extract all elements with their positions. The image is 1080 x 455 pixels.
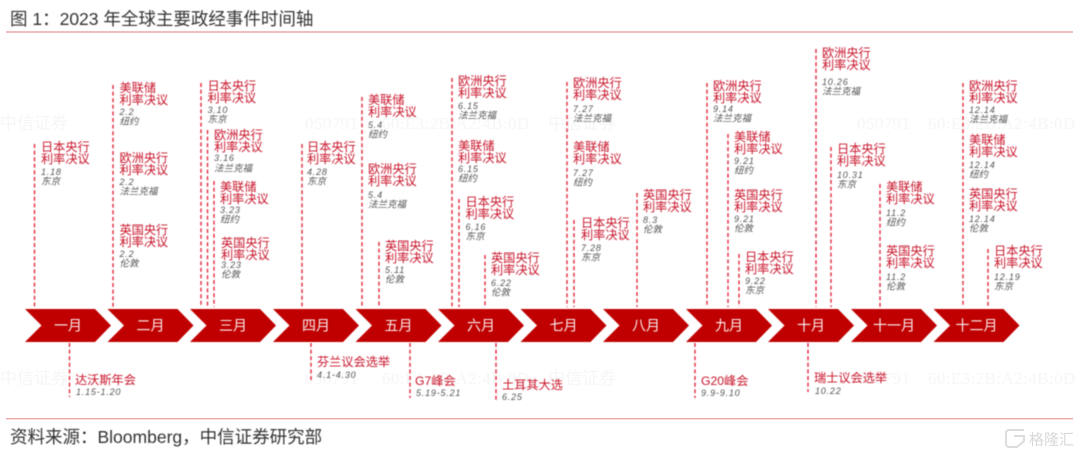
september events: 利率决议 [734, 199, 783, 214]
july events: 法兰克福 [573, 114, 613, 124]
event: G20峰会 [695, 343, 748, 398]
april events: 日本央行 [307, 140, 356, 154]
december events: 12.14 [969, 105, 996, 115]
october events: 10.26 [822, 77, 849, 87]
june events: 利率决议 [491, 262, 540, 277]
november events: 11.2 [886, 272, 906, 282]
september events: 日本央行 [745, 250, 794, 264]
july events: 东京 [581, 252, 602, 264]
watermark pattern: 60:E3:2B:A2:4B:0D [382, 369, 530, 388]
month: 七月 [520, 309, 606, 342]
november events: 美联储 [886, 179, 923, 194]
event: 达沃斯年会 [70, 343, 136, 397]
event: 芬兰议会选举 [311, 343, 390, 382]
november events: 伦敦 [886, 280, 906, 292]
month: 十二月 [934, 309, 1020, 342]
december events: 12.14 [969, 214, 996, 224]
month: 十一月: 十一月 [873, 318, 915, 334]
june events [452, 74, 540, 307]
event: 土耳其大选: 土耳其大选 [502, 378, 563, 392]
december events: 12.14 [969, 160, 996, 170]
april events: 4.28 [307, 167, 328, 177]
july events: 7.27 [573, 168, 594, 178]
watermark pattern: 中信证券 [548, 114, 616, 133]
month: 九月: 九月 [715, 318, 743, 334]
march events: 东京 [208, 114, 228, 126]
june events: 6.15 [458, 164, 479, 174]
january events: 东京 [41, 176, 62, 188]
june events: 纽约 [458, 172, 479, 184]
june events: 美联储 [458, 138, 495, 153]
may events: 利率决议 [368, 173, 417, 188]
july events [567, 76, 630, 307]
february events: 法兰克福 [120, 186, 159, 198]
event: G7峰会: G7峰会 [415, 374, 456, 388]
month: 一月: 一月 [54, 318, 82, 334]
november events: 英国央行 [886, 244, 935, 258]
march events [201, 79, 270, 307]
august events: 8.3 [643, 215, 658, 225]
september events: 利率决议 [734, 141, 783, 156]
event: 瑞士议会选举: 瑞士议会选举 [814, 371, 887, 385]
watermark pattern: 60:E3:2B:A2:4B:0D [928, 114, 1076, 133]
november events: 利率决议 [886, 255, 935, 270]
september events: 9.22 [745, 276, 766, 286]
watermark pattern: 中信证券 [548, 369, 616, 388]
february events: 利率决议 [120, 162, 168, 177]
march events: 纽约 [220, 214, 241, 226]
july events: 日本央行 [581, 216, 630, 230]
november events: 利率决议 [886, 191, 935, 206]
march events: 美联储 [220, 179, 257, 194]
july events: 利率决议 [573, 87, 622, 102]
december events: 法兰克福 [969, 114, 1009, 126]
september events: 利率决议 [713, 90, 762, 105]
october events: 10.31 [837, 170, 864, 180]
watermark pattern: 050791 [305, 369, 358, 388]
march events: 伦敦 [221, 268, 242, 280]
may events: 法兰克福 [368, 200, 408, 210]
events above the timeline [34, 46, 1043, 307]
event: G20峰会: 9.9-9.10 [701, 388, 740, 398]
december events: 欧洲央行 [969, 79, 1018, 93]
march events: 日本央行 [208, 79, 256, 93]
march events: 欧洲央行 [214, 128, 263, 142]
december events: 伦敦 [969, 222, 990, 234]
month: 十一月 [851, 309, 937, 342]
september events [707, 79, 794, 307]
month: 十月: 十月 [797, 318, 825, 334]
october events: 法兰克福 [822, 86, 862, 98]
february events: 美联储 [120, 80, 156, 95]
december events: 日本央行 [994, 244, 1043, 258]
december events: 利率决议 [969, 144, 1018, 159]
january events: 1.18 [41, 167, 62, 177]
april events: 利率决议 [307, 151, 356, 166]
september events: 英国央行 [734, 188, 783, 202]
september events: 9.21 [734, 214, 755, 224]
august events: 伦敦 [643, 224, 664, 236]
january events: 利率决议 [41, 151, 90, 166]
march events: 3.10 [208, 105, 228, 115]
month: 三月 [190, 309, 276, 342]
august events [637, 188, 692, 307]
november events [880, 179, 935, 307]
july events: 利率决议 [573, 151, 622, 166]
june events: 欧洲央行 [458, 74, 507, 88]
month: 四月: 四月 [302, 318, 330, 334]
september events: 9.21 [734, 156, 755, 166]
events below the timeline [70, 343, 887, 402]
month: 十二月: 十二月 [956, 318, 998, 334]
october events: 利率决议 [837, 153, 886, 168]
march events: 利率决议 [208, 90, 256, 105]
april events [302, 140, 356, 307]
october events [816, 46, 886, 307]
event: 瑞士议会选举: 10.22 [815, 386, 842, 396]
month: 七月: 七月 [550, 318, 578, 334]
march events: 3.23 [220, 205, 241, 215]
watermark pattern: 60:E3:2B:A2:4B:0D [928, 369, 1076, 388]
event: 达沃斯年会: 1.15-1.20 [76, 387, 121, 397]
logo: 格隆汇 [1006, 430, 1074, 448]
may events: 纽约 [368, 128, 389, 140]
june events: 6.15 [458, 101, 479, 111]
september events: 纽约 [734, 164, 754, 176]
march events: 3.23 [221, 260, 242, 270]
march events: 利率决议 [214, 139, 263, 154]
event: 芬兰议会选举: 4.1-4.30 [317, 370, 356, 380]
event: G7峰会 [410, 343, 461, 398]
january events: 日本央行 [41, 140, 90, 154]
may events: 伦敦 [385, 274, 406, 286]
february events: 伦敦 [120, 258, 140, 270]
july events: 纽约 [573, 176, 594, 188]
october events: 欧洲央行 [822, 46, 871, 60]
watermark pattern: 050791 [305, 114, 358, 133]
june events: 法兰克福 [458, 110, 498, 122]
month: 二月 [108, 309, 194, 342]
month: 六月: 六月 [467, 318, 495, 334]
august events: 英国央行 [643, 188, 692, 202]
event: 瑞士议会选举 [808, 343, 887, 396]
february events: 英国央行 [120, 223, 168, 237]
title: 图 1：2023 年全球主要政经事件时间轴 [10, 9, 313, 29]
month: 四月 [273, 309, 359, 342]
event: 达沃斯年会: 达沃斯年会 [75, 373, 136, 387]
month: 五月: 五月 [384, 318, 412, 334]
february events [113, 80, 168, 307]
august events: 利率决议 [643, 199, 692, 214]
december events: 纽约 [969, 168, 990, 180]
may events: 美联储 [368, 92, 405, 107]
may events: 5.4 [368, 190, 383, 200]
event: G7峰会: 5.19-5.21 [416, 388, 461, 398]
october events: 东京 [837, 178, 858, 190]
may events: 欧洲央行 [368, 162, 417, 176]
december events: 利率决议 [969, 90, 1018, 105]
june events: 利率决议 [458, 85, 507, 100]
july events: 美联储 [573, 139, 610, 154]
march events: 3.16 [214, 153, 235, 163]
june events: 英国央行 [491, 251, 540, 265]
watermark pattern: 60:E3:2B:A2:4B:0D [382, 114, 530, 133]
december events: 利率决议 [969, 198, 1018, 213]
event: 土耳其大选: 6.25 [502, 392, 523, 402]
february events: 2.2 [118, 107, 134, 117]
watermark pattern [0, 114, 1076, 388]
source note: 资料来源：Bloomberg，中信证券研究部 [10, 427, 322, 447]
may events: 英国央行 [385, 239, 434, 253]
december events: 利率决议 [994, 255, 1043, 270]
watermark pattern: 050791 [857, 114, 910, 133]
march events: 英国央行 [221, 236, 270, 250]
november events: 11.2 [886, 208, 906, 218]
june events: 日本央行 [466, 195, 514, 209]
watermark pattern: 中信证券 [0, 369, 68, 388]
month: 五月 [356, 309, 442, 342]
december events: 英国央行 [969, 187, 1018, 201]
may events: 利率决议 [368, 104, 417, 119]
may events: 利率决议 [385, 250, 434, 265]
december events [963, 79, 1043, 307]
march events: 利率决议 [220, 191, 269, 206]
logo: 格隆汇: 格隆汇 [1029, 432, 1074, 448]
month: 十月 [768, 309, 854, 342]
september events: 法兰克福 [713, 114, 753, 124]
june events: 伦敦 [491, 286, 512, 298]
july events: 7.28 [581, 243, 602, 253]
february events: 纽约 [120, 116, 140, 128]
september events: 东京 [745, 284, 766, 296]
december events: 12.19 [994, 272, 1021, 282]
october events: 日本央行 [837, 142, 886, 156]
may events [362, 92, 434, 307]
month: 八月 [603, 309, 689, 342]
event: G20峰会: G20峰会 [701, 374, 748, 388]
july events: 7.27 [573, 104, 594, 114]
february events: 利率决议 [120, 92, 168, 107]
september events: 欧洲央行 [713, 79, 762, 93]
month: 六月 [438, 309, 524, 342]
month: 九月 [686, 309, 772, 342]
april events: 东京 [307, 176, 328, 188]
month: 三月: 三月 [219, 318, 247, 334]
june events: 6.22 [491, 278, 512, 288]
february events: 欧洲央行 [120, 151, 168, 165]
may events: 5.11 [385, 265, 405, 275]
june events: 利率决议 [466, 206, 514, 221]
december events: 东京 [994, 280, 1014, 292]
september events: 利率决议 [745, 261, 794, 276]
event: 芬兰议会选举: 芬兰议会选举 [317, 355, 390, 369]
watermark pattern: 中信证券 [0, 114, 68, 133]
event: 土耳其大选 [496, 343, 563, 402]
december events: 美联储 [969, 132, 1006, 147]
october events: 利率决议 [822, 57, 871, 72]
march events: 利率决议 [221, 247, 270, 262]
july events: 利率决议 [581, 227, 630, 242]
watermark pattern: 050791 [857, 369, 910, 388]
june events: 利率决议 [458, 150, 507, 165]
march events: 法兰克福 [214, 164, 254, 174]
february events: 2.2 [118, 249, 134, 259]
february events: 2.2 [118, 177, 134, 187]
november events: 纽约 [886, 216, 906, 228]
timeline of month chevrons [25, 309, 1020, 342]
september events: 美联储 [734, 129, 771, 144]
month: 二月: 二月 [136, 318, 164, 334]
june events: 6.16 [466, 222, 486, 232]
may events: 5.4 [368, 120, 383, 130]
july events: 欧洲央行 [573, 76, 622, 90]
january events [34, 140, 90, 307]
month: 八月: 八月 [632, 318, 660, 334]
month: 一月 [25, 309, 111, 342]
june events: 东京 [466, 230, 486, 242]
september events: 9.14 [713, 104, 734, 114]
september events: 伦敦 [734, 222, 754, 234]
february events: 利率决议 [120, 234, 168, 249]
